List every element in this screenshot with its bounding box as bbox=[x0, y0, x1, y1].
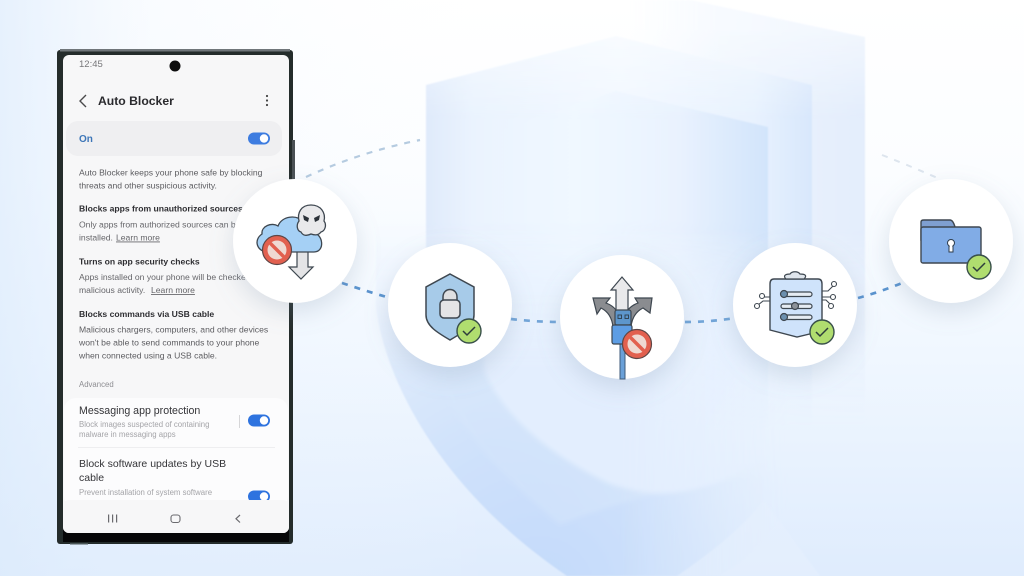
intro text: threats and other suspicious activity. bbox=[79, 180, 217, 190]
section 1 heading: Blocks apps from unauthorized sources bbox=[79, 204, 243, 214]
on label: On bbox=[79, 134, 93, 145]
phone body bbox=[57, 50, 293, 544]
section 1 body: installed. bbox=[79, 232, 113, 242]
left arrow bbox=[593, 298, 620, 327]
back chevron bbox=[80, 95, 86, 107]
folder bbox=[921, 220, 955, 240]
toggle on bbox=[248, 132, 270, 144]
shield upper layers bbox=[426, 12, 866, 361]
section 1 body: Learn more bbox=[116, 232, 160, 242]
intro text: Auto Blocker keeps your phone safe by blocking bbox=[79, 168, 263, 178]
padlock bbox=[440, 290, 460, 318]
clipboard bbox=[770, 279, 822, 337]
skull bbox=[297, 205, 325, 235]
overflow menu bbox=[266, 95, 268, 106]
icon circle: shield lock bbox=[388, 243, 512, 367]
shield lower bowl bbox=[378, 303, 714, 576]
right arrow bbox=[624, 298, 652, 327]
cloud bbox=[257, 217, 322, 252]
icon circle: cloud threat bbox=[233, 179, 357, 303]
check badge bbox=[810, 320, 834, 344]
section 3 body: Malicious chargers, computers, and other devices bbox=[79, 324, 268, 334]
section 2 body: malicious activity. bbox=[79, 285, 145, 295]
row divider bbox=[78, 447, 275, 448]
messaging protection description: Block images suspected of containing bbox=[79, 420, 209, 429]
navigation bar bbox=[63, 500, 289, 533]
sliders bbox=[780, 290, 812, 320]
down arrow bbox=[289, 250, 313, 279]
screen title: Auto Blocker bbox=[98, 94, 174, 108]
toggle on bbox=[239, 414, 270, 428]
prohibited badge bbox=[262, 236, 292, 264]
up arrow bbox=[611, 277, 633, 312]
dashed connector line bbox=[306, 140, 942, 322]
shield lower right edge bbox=[677, 500, 820, 576]
advanced label: Advanced bbox=[79, 380, 114, 389]
shield bbox=[426, 274, 474, 340]
icon circle: settings checklist bbox=[733, 243, 857, 367]
check badge bbox=[457, 319, 481, 343]
section 2 heading: Turns on app security checks bbox=[79, 256, 200, 266]
usb updates title: Block software updates by USB bbox=[79, 458, 226, 470]
icon circle: usb bbox=[560, 255, 684, 379]
check badge bbox=[967, 255, 991, 279]
section 2 body: Learn more bbox=[151, 285, 195, 295]
on row bbox=[66, 121, 282, 156]
background shield bbox=[376, 0, 865, 576]
toggle on bbox=[248, 490, 270, 502]
phone bbox=[57, 49, 295, 544]
section 1 body: Only apps from authorized sources can be bbox=[79, 220, 241, 230]
section 3 body: won't be able to send commands to your phone bbox=[78, 338, 260, 348]
settings card bbox=[64, 398, 288, 508]
messaging protection description: malware in messaging apps bbox=[79, 430, 176, 439]
camera bbox=[170, 60, 180, 72]
status bar time: 12:45 bbox=[79, 59, 103, 70]
circuit nodes bbox=[754, 282, 836, 308]
usb connector bbox=[612, 310, 632, 379]
usb updates title: cable bbox=[79, 472, 104, 484]
prohibited badge bbox=[622, 330, 652, 358]
section 3 body: when connected using a USB cable. bbox=[78, 350, 217, 360]
keyhole bbox=[948, 240, 954, 252]
messaging protection title: Messaging app protection bbox=[79, 405, 200, 417]
phone screen bbox=[63, 55, 289, 533]
section 3 heading: Blocks commands via USB cable bbox=[79, 309, 214, 319]
icon circle: locked folder bbox=[889, 179, 1013, 303]
section 2 body: Apps installed on your phone will be checked for bbox=[79, 272, 263, 282]
usb updates description: Prevent installation of system software bbox=[79, 488, 212, 497]
